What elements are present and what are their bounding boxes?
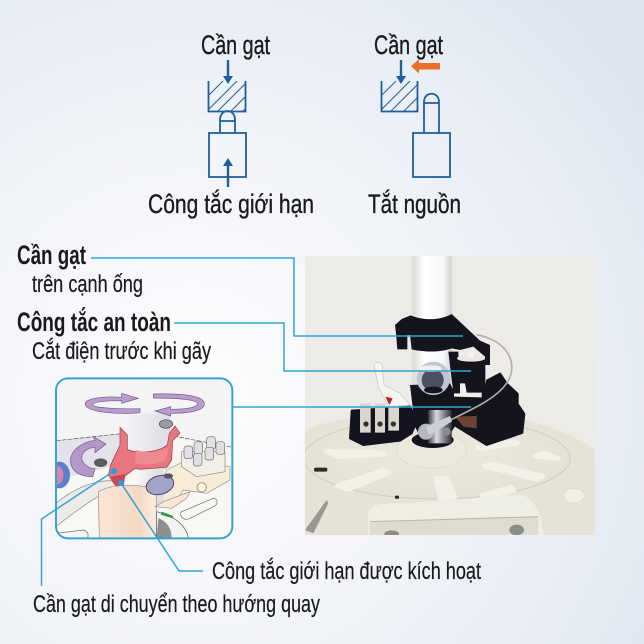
- chrome bolt: [417, 362, 450, 395]
- inset: rotation detail: [49, 378, 232, 538]
- hub: [397, 432, 467, 468]
- arrow: orange rotation: [411, 59, 440, 74]
- clamp on pole: [395, 314, 490, 365]
- leader line: lever on pipe edge: [91, 258, 463, 336]
- caption: lever moves with rotation: Cần gạt di chuyển theo hướng quay: [33, 591, 320, 618]
- arrow: switch up: [223, 158, 233, 187]
- lever block, left: [208, 81, 246, 112]
- heading: limit switch: Công tắc giới hạn: [148, 188, 314, 219]
- screw: [94, 458, 107, 467]
- heading: Cần gạt left: Cần gạt: [201, 30, 270, 60]
- chrome stem: [428, 410, 452, 443]
- black bracket base: [410, 383, 456, 434]
- caption: limit switch activated: Công tắc giới hạn được kích hoạt: [212, 558, 481, 585]
- inset peach cylinder: [98, 485, 157, 538]
- switch body, left: [209, 133, 246, 177]
- lower cover: [368, 495, 543, 535]
- inset upper pole: [134, 414, 170, 470]
- photo: fan mount with safety switch: [303, 250, 595, 538]
- screws: [384, 530, 399, 535]
- lever block, right: [380, 81, 418, 112]
- knob: [146, 473, 174, 496]
- leader line: lever moves: [42, 471, 114, 586]
- bolt: [159, 420, 173, 428]
- heading: power off: Tắt nguồn: [368, 188, 461, 219]
- left blue knob: [57, 462, 70, 488]
- leader line: safety switch: [174, 323, 471, 371]
- heading: Cần gạt right: Cần gạt: [374, 30, 443, 60]
- motor housing: [455, 374, 524, 445]
- marker: switch point: [118, 480, 124, 486]
- inset frame: [56, 378, 232, 538]
- label: Cần gạt: Cần gạt: [17, 240, 86, 270]
- arrow: lever down, right: [396, 60, 406, 84]
- red collar and lever: [108, 426, 180, 487]
- cable clamp: [418, 416, 452, 440]
- label: cuts power before breaking: Cắt điện trước khi gãy: [32, 338, 211, 365]
- leader line: inset to photo: [232, 406, 471, 408]
- arrow: lever down, left: [223, 60, 233, 84]
- inset bottom ring: [157, 512, 188, 538]
- switch plunger, right: [424, 94, 439, 133]
- terminal block: [350, 362, 417, 445]
- inset tray: [155, 492, 190, 508]
- diagram: power off: [380, 81, 451, 178]
- inset lower pole: [143, 470, 164, 505]
- diagram: limit switch engaged: [208, 81, 247, 178]
- leader line: limit switch activated: [121, 483, 203, 571]
- plate ribs: [326, 442, 558, 498]
- switch body, right: [413, 133, 450, 177]
- limit switch cylinder: [448, 351, 485, 398]
- inset terminals: [163, 436, 230, 501]
- white pole: [412, 250, 452, 410]
- canopy plate: [305, 418, 595, 535]
- label: on the pipe edge: trên cạnh ống: [32, 271, 143, 298]
- marker: lever point: [111, 468, 117, 474]
- inset plate: [56, 433, 232, 538]
- label: safety switch: Công tắc an toàn: [17, 306, 171, 337]
- top rotation rings: [85, 393, 204, 416]
- left rotation arrow: [71, 437, 106, 477]
- switch plunger, left: [220, 111, 235, 133]
- cable: [445, 335, 512, 423]
